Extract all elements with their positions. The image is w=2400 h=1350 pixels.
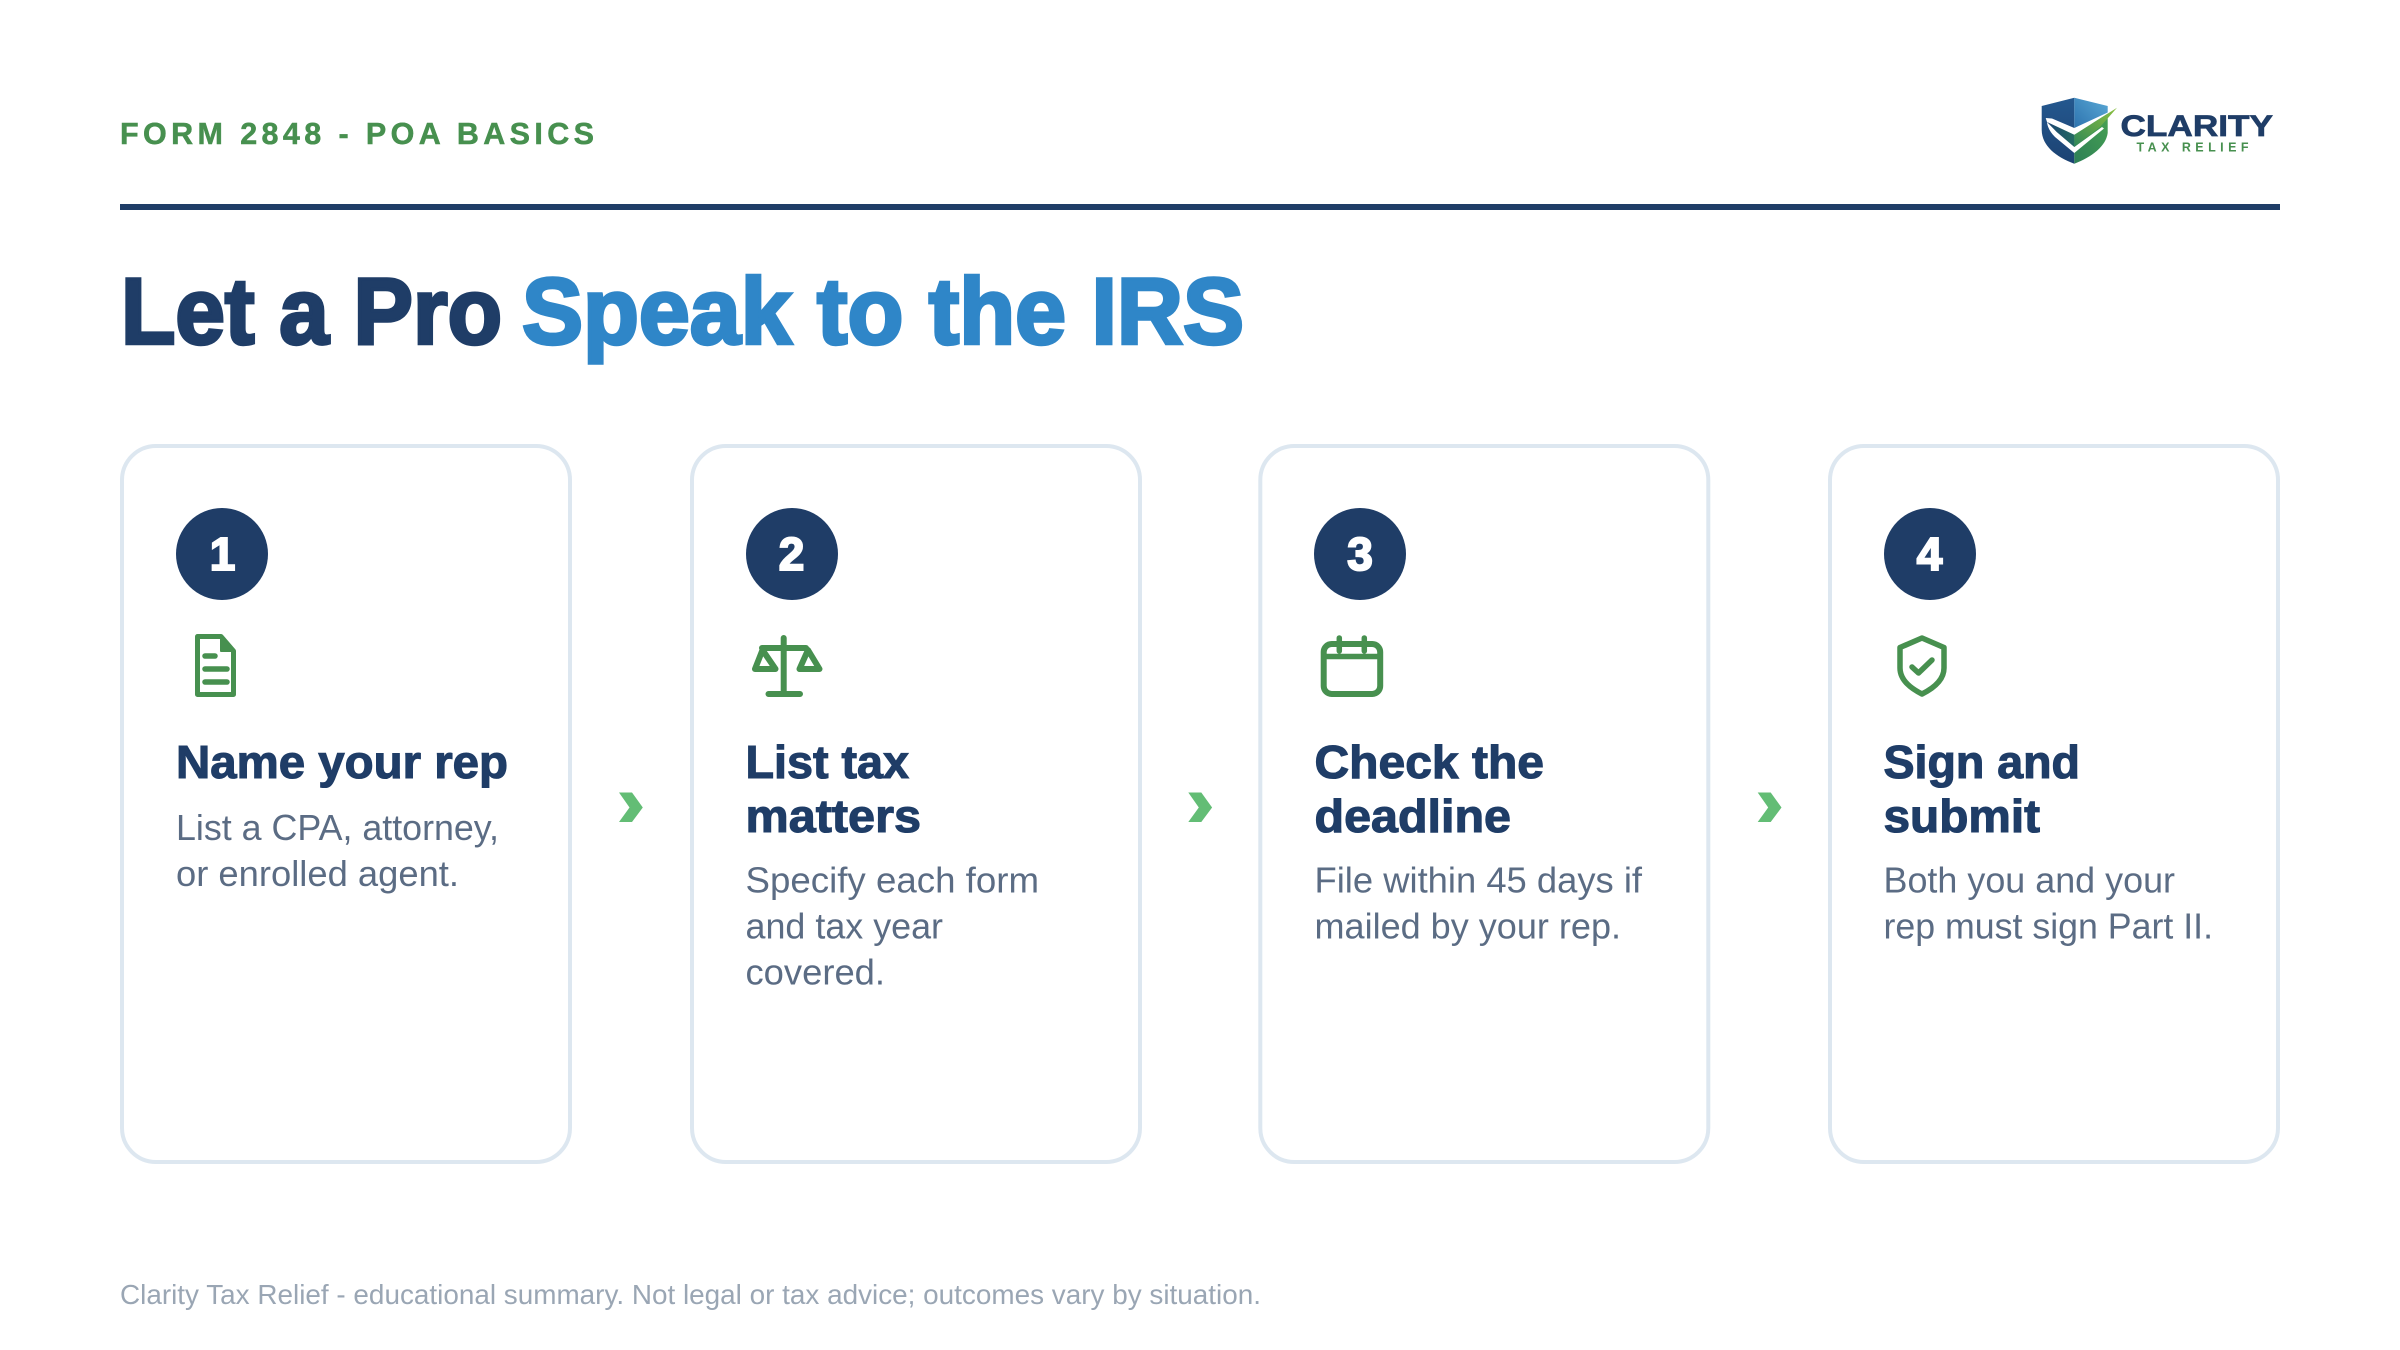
heading: Check the <box>1314 736 1544 788</box>
panel: step 4 <box>1830 446 2278 1162</box>
step number 3 <box>1314 508 1406 600</box>
arrow 3 to 4 <box>1758 792 1782 822</box>
body text: Both you and your <box>1884 860 2175 900</box>
icon: document <box>198 636 234 694</box>
arrow 2 to 3 <box>1188 792 1212 822</box>
eyebrow label: FORM 2848 - POA BASICS <box>120 117 594 151</box>
title: Let a Pro <box>121 258 502 364</box>
heading: Name your rep <box>176 736 508 788</box>
body text: Specify each form <box>746 860 1039 900</box>
logo wordmark: CLARITY <box>2120 110 2273 143</box>
step number 1: 1 <box>210 528 235 580</box>
step number 4 <box>1884 508 1976 600</box>
step number 1 <box>176 508 268 600</box>
title <box>121 258 1244 364</box>
logo tagline: TAX RELIEF <box>2136 141 2249 155</box>
title: Speak to the IRS <box>522 258 1244 364</box>
heading: submit <box>1884 790 2040 842</box>
body text: and tax year <box>746 906 943 946</box>
step number 2 <box>746 508 838 600</box>
panel: step 1 <box>122 446 570 1162</box>
icon: shield check <box>1900 638 1944 694</box>
heading: matters <box>746 790 921 842</box>
body text <box>1314 860 1643 946</box>
body text: List a CPA, attorney, <box>176 807 499 848</box>
heading: Sign and <box>1884 736 2080 788</box>
body text <box>176 807 499 894</box>
heading <box>1884 736 2080 842</box>
body text: mailed by your rep. <box>1314 906 1621 946</box>
panel: step 3 <box>1260 446 1708 1162</box>
icon: calendar <box>1324 638 1380 694</box>
arrow 1 to 2 <box>619 792 643 822</box>
body text: rep must sign Part II. <box>1884 906 2213 946</box>
logo: Clarity Tax Relief <box>2042 98 2273 164</box>
logo shield icon <box>2042 98 2117 164</box>
step number 4: 4 <box>1917 528 1943 580</box>
body text <box>1884 860 2213 946</box>
body text: covered. <box>746 952 885 992</box>
icon: scales <box>755 638 820 694</box>
header rule <box>120 204 2280 210</box>
heading: deadline <box>1314 790 1511 842</box>
step number 3: 3 <box>1347 528 1373 580</box>
body text <box>746 860 1039 992</box>
step number 2: 2 <box>779 528 804 580</box>
heading: List tax <box>746 736 909 788</box>
body text: File within 45 days if <box>1314 860 1643 900</box>
body text: or enrolled agent. <box>176 853 459 894</box>
heading <box>1314 736 1544 842</box>
heading <box>746 736 921 842</box>
panel: step 2 <box>692 446 1140 1162</box>
footer disclaimer: Clarity Tax Relief - educational summary. Not legal or tax advice; outcomes vary by situation. <box>120 1279 1261 1310</box>
